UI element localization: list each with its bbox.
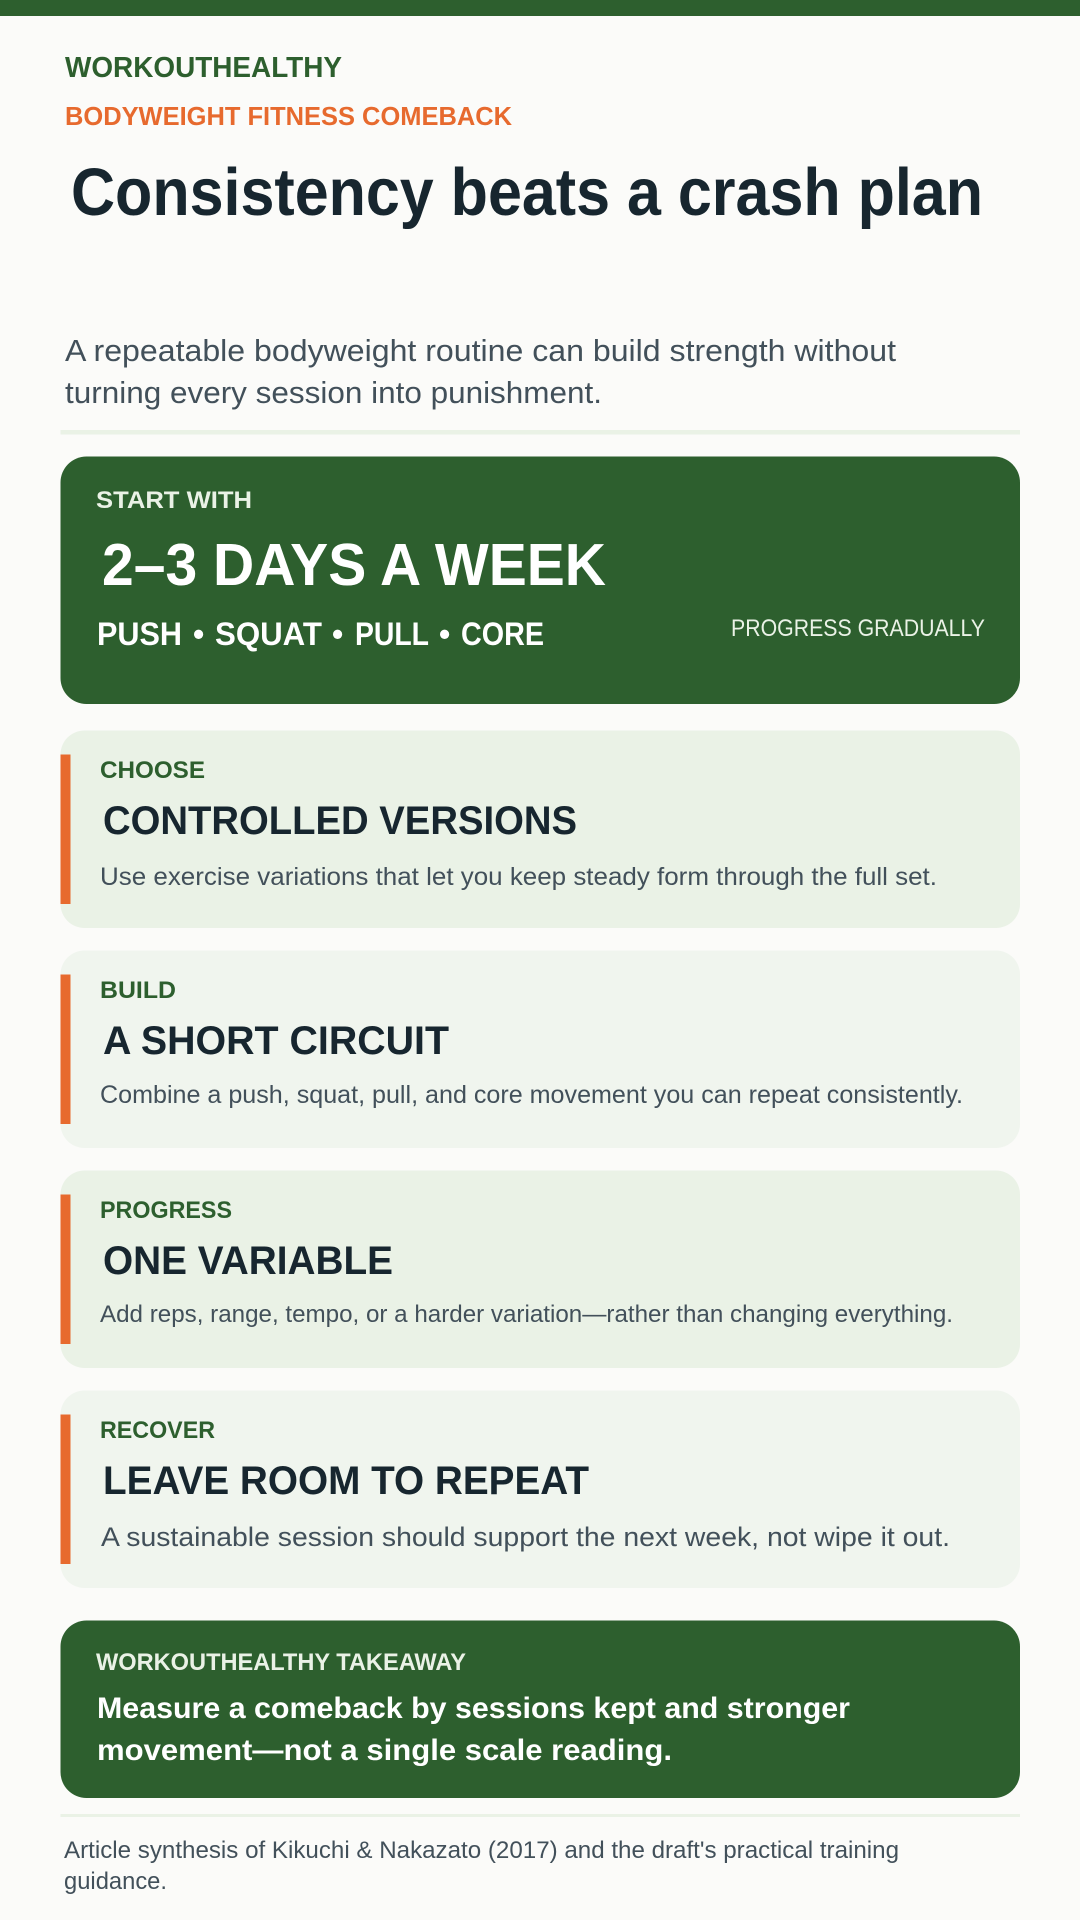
hero movements: PUSH: [97, 616, 182, 652]
takeaway label: WORKOUTHEALTHY TAKEAWAY: [96, 1649, 466, 1676]
subtitle: A repeatable bodyweight routine can build strength without: [65, 333, 896, 368]
panel: takeaway: [60, 1620, 1020, 1798]
accent bar: [60, 754, 70, 904]
heading: ONE VARIABLE: [103, 1239, 393, 1283]
accent bar: [60, 1414, 70, 1564]
panel: start with: [60, 456, 1020, 704]
panel: build: [60, 950, 1020, 1148]
subtitle: [65, 333, 896, 410]
hero label: START WITH: [96, 487, 252, 514]
description: Combine a push, squat, pull, and core movement you can repeat consistently.: [100, 1081, 963, 1109]
takeaway text: [97, 1692, 850, 1767]
accent bar: [60, 1194, 70, 1344]
hero movements: SQUAT: [215, 616, 322, 652]
takeaway text: Measure a comeback by sessions kept and stronger: [97, 1692, 850, 1725]
panel: choose: [60, 730, 1020, 928]
hero movements: PULL: [355, 616, 429, 652]
source footer: guidance.: [64, 1868, 167, 1895]
description: Add reps, range, tempo, or a harder variation—rather than changing everything.: [100, 1301, 953, 1328]
heading: CONTROLLED VERSIONS: [103, 799, 577, 843]
hero movements: •: [332, 616, 343, 652]
source footer: Article synthesis of Kikuchi & Nakazato (2017) and the draft's practical training: [64, 1837, 899, 1864]
top accent bar: [0, 0, 1080, 16]
takeaway text: movement—not a single scale reading.: [97, 1734, 672, 1767]
description: Use exercise variations that let you keep steady form through the full set.: [100, 863, 937, 891]
brand name: WORKOUTHEALTHY: [65, 52, 342, 84]
panel: progress: [60, 1170, 1020, 1368]
hero headline: 2–3 DAYS A WEEK: [102, 532, 606, 598]
hero note: PROGRESS GRADUALLY: [731, 615, 985, 642]
heading: LEAVE ROOM TO REPEAT: [103, 1459, 589, 1503]
label: CHOOSE: [100, 757, 205, 784]
accent bar: [60, 974, 70, 1124]
source footer: [64, 1837, 899, 1895]
label: BUILD: [100, 977, 176, 1004]
label: RECOVER: [100, 1417, 215, 1444]
label: PROGRESS: [100, 1197, 232, 1224]
subtitle: turning every session into punishment.: [65, 375, 602, 410]
hero movements: [97, 616, 544, 652]
hero movements: •: [193, 616, 204, 652]
eyebrow: BODYWEIGHT FITNESS COMEBACK: [65, 101, 512, 131]
hero movements: CORE: [461, 616, 544, 652]
title: Consistency beats a crash plan: [71, 155, 983, 230]
description: A sustainable session should support the next week, not wipe it out.: [101, 1522, 950, 1552]
heading: A SHORT CIRCUIT: [103, 1019, 449, 1063]
panel: recover: [60, 1390, 1020, 1588]
hero movements: •: [439, 616, 450, 652]
